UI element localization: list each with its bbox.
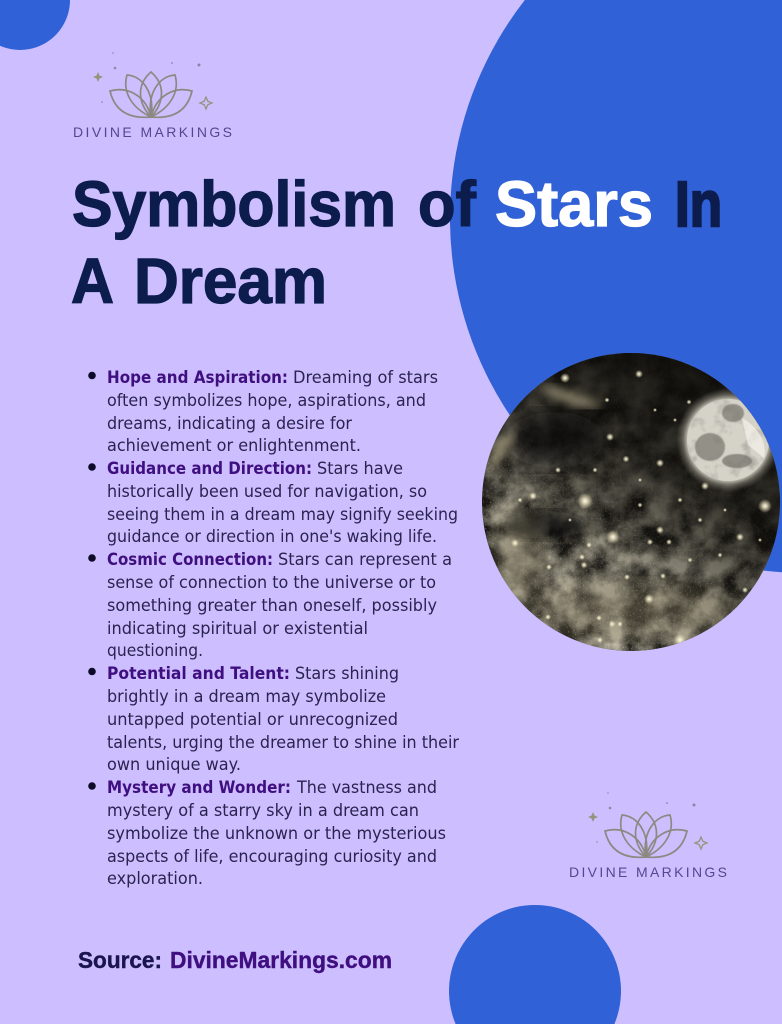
title: Stars xyxy=(495,168,653,240)
bullet: cosmic connection xyxy=(88,550,452,661)
stars xyxy=(511,370,772,646)
bullet: guidance and direction: Stars have xyxy=(317,459,403,479)
bullet: mystery and wonder: exploration. xyxy=(107,869,203,889)
bullet: hope and aspiration: Dreaming of stars xyxy=(293,368,438,388)
photo: night sky with moon xyxy=(482,353,780,651)
bullet: mystery and wonder: Mystery and Wonder: xyxy=(107,778,291,798)
bullet: potential and talent: own unique way. xyxy=(107,755,241,775)
top-left blue circle xyxy=(0,0,70,50)
bullet list xyxy=(88,368,459,889)
nebula texture xyxy=(482,353,780,651)
bullet: potential and talent: Stars shining xyxy=(295,664,399,684)
bullet: cosmic connection: questioning. xyxy=(107,641,203,661)
bullet: cosmic connection: Stars can represent a xyxy=(278,550,452,570)
bullet: cosmic connection: sense of connection to the universe or to xyxy=(107,573,436,593)
bullet: potential and talent: brightly in a dream may symbolize xyxy=(107,687,386,707)
moon xyxy=(676,388,780,492)
bullet: mystery and wonder: symbolize the unknown or the mysterious xyxy=(107,824,446,844)
bullet: potential and talent: untapped potential or unrecognized xyxy=(107,710,398,730)
bullet: hope and aspiration: dreams, indicating a desire for xyxy=(107,414,352,434)
bullet: cosmic connection: Cosmic Connection: xyxy=(107,550,273,570)
bullet: mystery and wonder: mystery of a starry sky in a dream can xyxy=(107,801,419,821)
icon: lotus and sparkles xyxy=(93,52,212,117)
bullet: potential and talent: talents, urging the dreamer to shine in their xyxy=(107,733,459,753)
title: Symbolism xyxy=(72,168,396,240)
logo: bottom right xyxy=(569,792,727,880)
bullet: hope and aspiration xyxy=(88,368,438,456)
bullet: mystery and wonder: aspects of life, encouraging curiosity and xyxy=(107,847,437,867)
bullet: mystery and wonder xyxy=(88,778,446,889)
bullet: guidance and direction: historically been used for navigation, so xyxy=(107,482,427,502)
title: A xyxy=(71,245,114,317)
bullet: guidance and direction: guidance or direction in one's waking life. xyxy=(107,527,437,547)
source line: DivineMarkings.com xyxy=(170,947,392,973)
bullet: hope and aspiration: achievement or enlightenment. xyxy=(107,436,361,456)
title: of xyxy=(418,168,477,240)
large blue circle xyxy=(450,0,782,572)
bullet: cosmic connection: indicating spiritual or existential xyxy=(107,619,368,639)
logo wordmark: DIVINE MARKINGS xyxy=(73,124,232,140)
source line: Source: xyxy=(78,947,162,973)
bullet: guidance and direction: seeing them in a dream may signify seeking xyxy=(107,505,458,525)
title xyxy=(71,168,722,317)
bullet: potential and talent xyxy=(88,664,459,775)
bullet: mystery and wonder: The vastness and xyxy=(296,778,437,798)
bullet: guidance and direction: Guidance and Direction: xyxy=(107,459,312,479)
bullet: potential and talent: Potential and Talent: xyxy=(107,664,290,684)
bullet: guidance and direction xyxy=(88,459,458,547)
icon: lotus and sparkles xyxy=(588,792,707,857)
logo wordmark: DIVINE MARKINGS xyxy=(569,864,727,880)
bullet: hope and aspiration: often symbolizes hope, aspirations, and xyxy=(107,391,426,411)
bullet: hope and aspiration: Hope and Aspiration: xyxy=(107,368,288,388)
title: In xyxy=(675,168,722,240)
bottom blue circle xyxy=(449,905,621,1024)
bullet: cosmic connection: something greater than oneself, possibly xyxy=(107,596,437,616)
logo: top left xyxy=(73,52,232,140)
title: Dream xyxy=(134,245,327,317)
